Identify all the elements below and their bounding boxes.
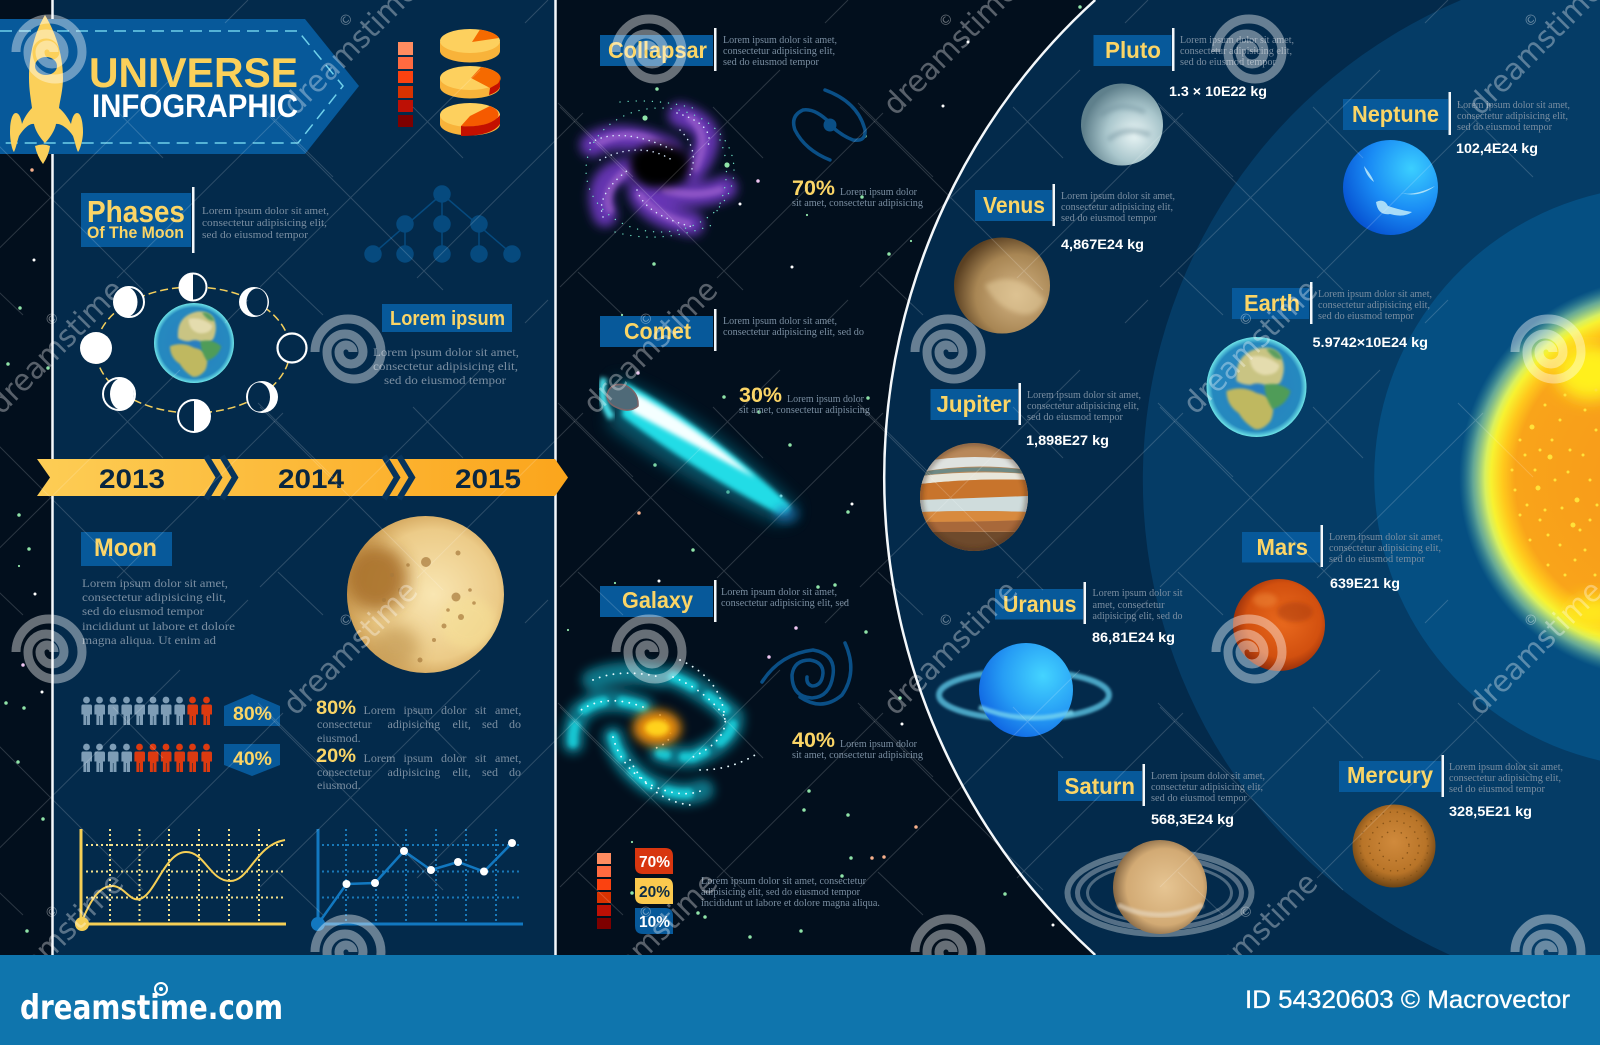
timeline <box>37 456 568 499</box>
stat: 40% <box>792 729 924 761</box>
stat: 70%: 70% <box>792 177 835 200</box>
timeline: 2013 <box>99 464 165 494</box>
colour scale bars: top <box>398 42 413 127</box>
line chart: blue <box>311 829 523 931</box>
collapsar text: consectetur adipisicing elit, <box>723 46 835 57</box>
stat text: 20%: ipsum <box>404 751 434 765</box>
planet: Pluto: consectetur adipisicing elit, <box>1180 46 1292 57</box>
stat text: 80%: 80% <box>316 698 356 719</box>
stat text: 80%: do <box>509 717 521 731</box>
stat text: 20%: Lorem <box>364 751 396 765</box>
planet: Venus: 4,867E24 kg <box>1061 236 1144 252</box>
galaxy text: consectetur adipisicing elit, sed <box>721 598 850 609</box>
planet: Earth: 5.9742×10E24 kg <box>1312 334 1428 350</box>
icon: galaxy spiral <box>762 643 851 704</box>
galaxy heading <box>600 580 716 622</box>
planet: Mercury: consectetur adipisicing elit, <box>1449 773 1561 784</box>
planet: Pluto: Lorem ipsum dolor sit amet, <box>1180 35 1294 46</box>
planet: Jupiter: Lorem ipsum dolor sit amet, <box>1027 390 1141 401</box>
planet: Mercury <box>1339 755 1563 888</box>
planet: Mercury: Mercury <box>1347 762 1433 788</box>
stat: 40%: sit amet, consectetur adipisicing <box>792 750 924 761</box>
stat text: 80%: amet, <box>495 703 521 717</box>
icon: network <box>365 186 520 262</box>
planet: Mercury: 328,5E21 kg <box>1449 803 1532 819</box>
bottom note text: adipisicing elit, sed do eiusmod tempor <box>701 887 860 898</box>
moon text: incididunt ut labore et dolore <box>82 619 235 633</box>
timeline: 2015 <box>455 464 521 494</box>
planet: Neptune <box>1343 92 1570 235</box>
pie charts <box>440 29 501 136</box>
line chart: yellow <box>75 829 286 931</box>
moon text <box>82 576 235 647</box>
stat: 40%: 40% <box>792 729 835 752</box>
solar system orbit rings <box>884 0 1600 955</box>
planet: Saturn: sed do eiusmod tempor <box>1151 793 1247 804</box>
badges <box>635 848 673 934</box>
stat: 30%: sit amet, consectetur adipisicing <box>739 405 871 416</box>
sun <box>1459 287 1600 669</box>
planet: Earth: Earth <box>1244 290 1300 316</box>
stat: 70%: sit amet, consectetur adipisicing <box>792 198 924 209</box>
bottom note text <box>701 876 880 909</box>
planet: Neptune: Neptune <box>1352 101 1439 127</box>
comet heading <box>600 309 716 351</box>
phases heading: Phases <box>87 194 185 229</box>
lorem ipsum callout: sed do eiusmod tempor <box>384 373 506 387</box>
comet illustration <box>602 378 798 522</box>
planet: Uranus: Uranus <box>1003 591 1076 617</box>
footer bar: ID 54320603 © Macrovector <box>1245 986 1570 1014</box>
phases heading: Of The Moon <box>87 223 184 242</box>
planet: Venus: consectetur adipisicing elit, <box>1061 202 1173 213</box>
planet: Earth: consectetur adipisicing elit, <box>1318 300 1430 311</box>
moon phases diagram <box>80 273 306 432</box>
stat text: 80%: sed <box>482 717 498 731</box>
planet: Saturn <box>1058 764 1265 934</box>
moon text: sed do eiusmod tempor <box>82 604 204 618</box>
comet text: consectetur adipisicing elit, sed do <box>723 327 864 338</box>
phases text: sed do eiusmod tempor <box>202 230 309 241</box>
lorem ipsum callout: Lorem ipsum <box>390 308 505 330</box>
badges: 70% <box>639 854 670 871</box>
planet: Mars: Lorem ipsum dolor sit amet, <box>1329 532 1443 543</box>
rocket <box>10 15 83 164</box>
stat: 70%: Lorem ipsum dolor <box>840 187 917 198</box>
stat text: 20%: eiusmod. <box>317 778 361 792</box>
collapsar heading: Collapsar <box>608 37 707 63</box>
planet: Saturn: 568,3E24 kg <box>1151 811 1234 827</box>
comet text: Lorem ipsum dolor sit amet, <box>723 316 837 327</box>
people chart: 40%: 40% <box>233 749 272 770</box>
planet: Uranus: adipisicing elit, sed do <box>1092 611 1182 622</box>
footer bar <box>0 955 1600 1045</box>
stat text: 80%: dolor <box>441 703 466 717</box>
panel: left column <box>52 0 556 955</box>
planet: Saturn: Saturn <box>1064 773 1135 799</box>
planet: Earth: Lorem ipsum dolor sit amet, <box>1318 289 1432 300</box>
galaxy text <box>721 587 850 609</box>
planet: Mercury: sed do eiusmod tempor <box>1449 784 1545 795</box>
phases text: Lorem ipsum dolor sit amet, <box>202 206 329 217</box>
galaxy text: Lorem ipsum dolor sit amet, <box>721 587 837 598</box>
moon text: Lorem ipsum dolor sit amet, <box>82 576 228 590</box>
lorem ipsum callout: consectetur adipisicing elit, <box>373 359 518 373</box>
icon: black hole <box>794 90 865 160</box>
planet: Neptune: 102,4E24 kg <box>1456 140 1538 156</box>
stat text: 20%: elit, <box>452 765 471 779</box>
collapsar text: sed do eiusmod tempor <box>723 57 819 68</box>
badges: 20% <box>639 884 670 901</box>
timeline: 2014 <box>278 464 344 494</box>
planet: Venus <box>954 184 1175 334</box>
stat text: 20% <box>316 746 521 792</box>
moon heading <box>81 532 172 566</box>
collapsar heading <box>600 28 716 71</box>
planet: Saturn: Lorem ipsum dolor sit amet, <box>1151 771 1265 782</box>
planet: Pluto <box>1081 28 1294 166</box>
planet: Jupiter: Jupiter <box>936 391 1011 417</box>
stat text: 80% <box>316 698 521 745</box>
title banner <box>0 19 359 154</box>
stat text: 20%: dolor <box>441 751 466 765</box>
phases heading <box>81 187 194 253</box>
planet: Pluto: sed do eiusmod tempor <box>1180 57 1276 68</box>
stat text: 80%: sit <box>475 703 487 717</box>
people chart: 80% <box>81 694 280 726</box>
bottom note text: incididunt ut labore et dolore magna aliqua. <box>701 898 880 909</box>
planet: Mars: sed do eiusmod tempor <box>1329 554 1425 565</box>
people chart: 80%: 80% <box>233 704 272 725</box>
stat text: 20%: do <box>509 765 521 779</box>
stat text: 80%: Lorem <box>364 703 396 717</box>
black hole illustration <box>586 101 734 237</box>
stat text: 20%: sed <box>482 765 498 779</box>
stat text: 20%: amet, <box>495 751 521 765</box>
moon planet <box>344 516 504 673</box>
stat text: 80%: adipisicing <box>388 717 440 731</box>
stat text: 80%: ipsum <box>404 703 434 717</box>
planet: Earth: sed do eiusmod tempor <box>1318 311 1414 322</box>
planet: Uranus: 86,81E24 kg <box>1092 629 1175 645</box>
stat: 30%: Lorem ipsum dolor <box>787 394 864 405</box>
planet: Neptune: sed do eiusmod tempor <box>1457 122 1552 133</box>
moon heading: Moon <box>94 534 157 562</box>
lorem ipsum callout <box>373 304 519 387</box>
bottom note text: Lorem ipsum dolor sit amet, consectetur <box>701 876 866 887</box>
planet: Jupiter: 1,898E27 kg <box>1026 432 1109 448</box>
planet: Mars: 639E21 kg <box>1330 575 1400 591</box>
planet: Mercury: Lorem ipsum dolor sit amet, <box>1449 762 1563 773</box>
comet text <box>723 316 864 338</box>
planet: Neptune: consectetur adipisicing elit, <box>1457 111 1568 122</box>
badges: 10% <box>639 914 670 931</box>
title banner: UNIVERSE <box>89 49 298 96</box>
stat text: 20%: consectetur <box>317 765 372 779</box>
colour scale bars: bottom <box>597 853 611 929</box>
planet: Pluto: Pluto <box>1105 37 1161 63</box>
stat text: 80%: consectetur <box>317 717 372 731</box>
stars <box>6 7 1080 937</box>
planet: Neptune: Lorem ipsum dolor sit amet, <box>1457 100 1570 111</box>
phases text <box>202 206 329 241</box>
footer bar: dreamstime.com <box>20 988 283 1028</box>
planet: Uranus <box>939 582 1183 737</box>
planet: Jupiter <box>920 383 1141 552</box>
moon text: consectetur adipisicing elit, <box>82 590 226 604</box>
comet heading: Comet <box>624 318 691 344</box>
collapsar text: Lorem ipsum dolor sit amet, <box>723 35 837 46</box>
stat: 30%: 30% <box>739 384 782 407</box>
galaxy heading: Galaxy <box>622 587 693 613</box>
stat text: 80%: elit, <box>452 717 471 731</box>
phases text: consectetur adipisicing elit, <box>202 218 327 229</box>
planet: Uranus: amet, consectetur <box>1092 600 1165 611</box>
planet: Mars: consectetur adipisicing elit, <box>1329 543 1441 554</box>
planet: Jupiter: consectetur adipisicing elit, <box>1027 401 1139 412</box>
stat text: 80%: eiusmod. <box>317 731 361 745</box>
stat text: 20%: adipisicing <box>388 765 440 779</box>
planet: Mars: Mars <box>1256 534 1308 560</box>
stat text: 20%: 20% <box>316 746 356 767</box>
stat: 30% <box>739 384 871 416</box>
planet: Venus: sed do eiusmod tempor <box>1061 213 1157 224</box>
planet: Mars <box>1233 525 1443 671</box>
lorem ipsum callout: Lorem ipsum dolor sit amet, <box>373 345 519 359</box>
planet: Saturn: consectetur adipisicing elit, <box>1151 782 1263 793</box>
stat text: 20%: sit <box>475 751 487 765</box>
planet: Pluto: 1.3 × 10E22 kg <box>1169 83 1267 99</box>
galaxy illustration <box>573 660 755 805</box>
planet: Venus: Venus <box>983 192 1045 218</box>
stat: 70% <box>792 177 924 209</box>
collapsar text <box>723 35 837 68</box>
moon text: magna aliqua. Ut enim ad <box>82 633 216 647</box>
planet: Jupiter: sed do eiusmod tempor <box>1027 412 1123 423</box>
planet: Earth <box>1206 282 1432 437</box>
planet: Uranus: Lorem ipsum dolor sit <box>1092 588 1183 599</box>
stat: 40%: Lorem ipsum dolor <box>840 739 917 750</box>
title banner: INFOGRAPHIC <box>92 88 298 124</box>
planet: Venus: Lorem ipsum dolor sit amet, <box>1061 191 1175 202</box>
people chart: 40% <box>81 744 280 776</box>
